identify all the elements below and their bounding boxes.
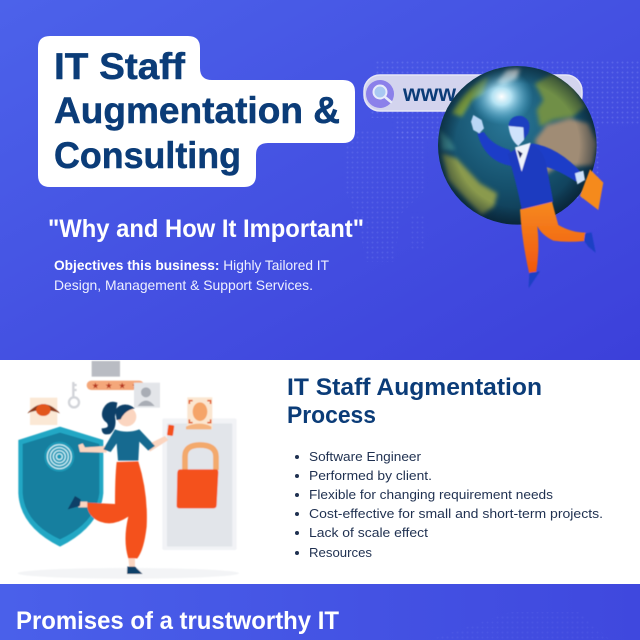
woman leg and shoes [78, 502, 135, 567]
man shirt [515, 143, 531, 172]
title box: Consulting [54, 135, 241, 176]
woman figure [68, 402, 174, 574]
title box: IT Staff [54, 46, 186, 87]
objectives text [54, 257, 329, 293]
search bar [364, 75, 582, 111]
panel: promises section [0, 584, 640, 640]
heading: process: Process [287, 402, 376, 429]
woman arms [78, 436, 168, 453]
bullet list: Flexible for changing requirement needs [309, 487, 554, 502]
panel: process section [0, 360, 640, 584]
profile card [134, 383, 160, 408]
phone [167, 425, 174, 436]
face scan card [186, 397, 212, 429]
icon: globe [438, 66, 597, 225]
objectives text: Design, Management & Support Services. [54, 277, 313, 293]
man jacket [508, 144, 553, 209]
bullet list: Lack of scale effect [309, 525, 428, 540]
rating bar: ★ [132, 381, 140, 391]
fingerprint [44, 442, 74, 472]
bullet list: Cost-effective for small and short-term projects. [309, 506, 603, 521]
man head [508, 125, 525, 146]
man arms [477, 132, 583, 182]
ground shadow [18, 568, 239, 579]
title box: Augmentation & [54, 90, 340, 131]
subtitle: "Why and How It Important" [48, 215, 364, 243]
bullet list: Resources [309, 545, 373, 560]
man legs [520, 202, 586, 274]
heading: process: IT Staff Augmentation [287, 374, 542, 401]
bullet list [295, 449, 603, 560]
title box [38, 36, 355, 187]
woman trousers [87, 461, 147, 558]
search bar: www [402, 80, 456, 106]
rating bar [87, 381, 144, 391]
folder [92, 361, 120, 377]
rating bar: ★ [118, 381, 126, 391]
man bag [580, 169, 603, 210]
rating bar: ★ [92, 381, 100, 391]
heading: promises: Promises of a trustworthy IT [16, 607, 339, 635]
eye card [27, 398, 60, 425]
security panel [162, 418, 237, 550]
illustration: woman with shield and lock [18, 361, 239, 579]
padlock [177, 445, 218, 508]
man hands [471, 115, 484, 133]
key [69, 382, 79, 407]
objectives text: Objectives this business: Highly Tailored IT [54, 257, 329, 273]
man shoes [529, 233, 596, 288]
woman head [117, 407, 136, 426]
panel: hero background [0, 0, 640, 360]
illustration: running businessman [471, 115, 603, 288]
shield [18, 427, 103, 547]
rating bar: ★ [105, 381, 113, 391]
woman top [103, 429, 155, 461]
bullet list: Software Engineer [309, 449, 422, 464]
bullet list: Performed by client. [309, 468, 432, 483]
heading: process [287, 374, 542, 429]
woman hair [102, 402, 117, 434]
